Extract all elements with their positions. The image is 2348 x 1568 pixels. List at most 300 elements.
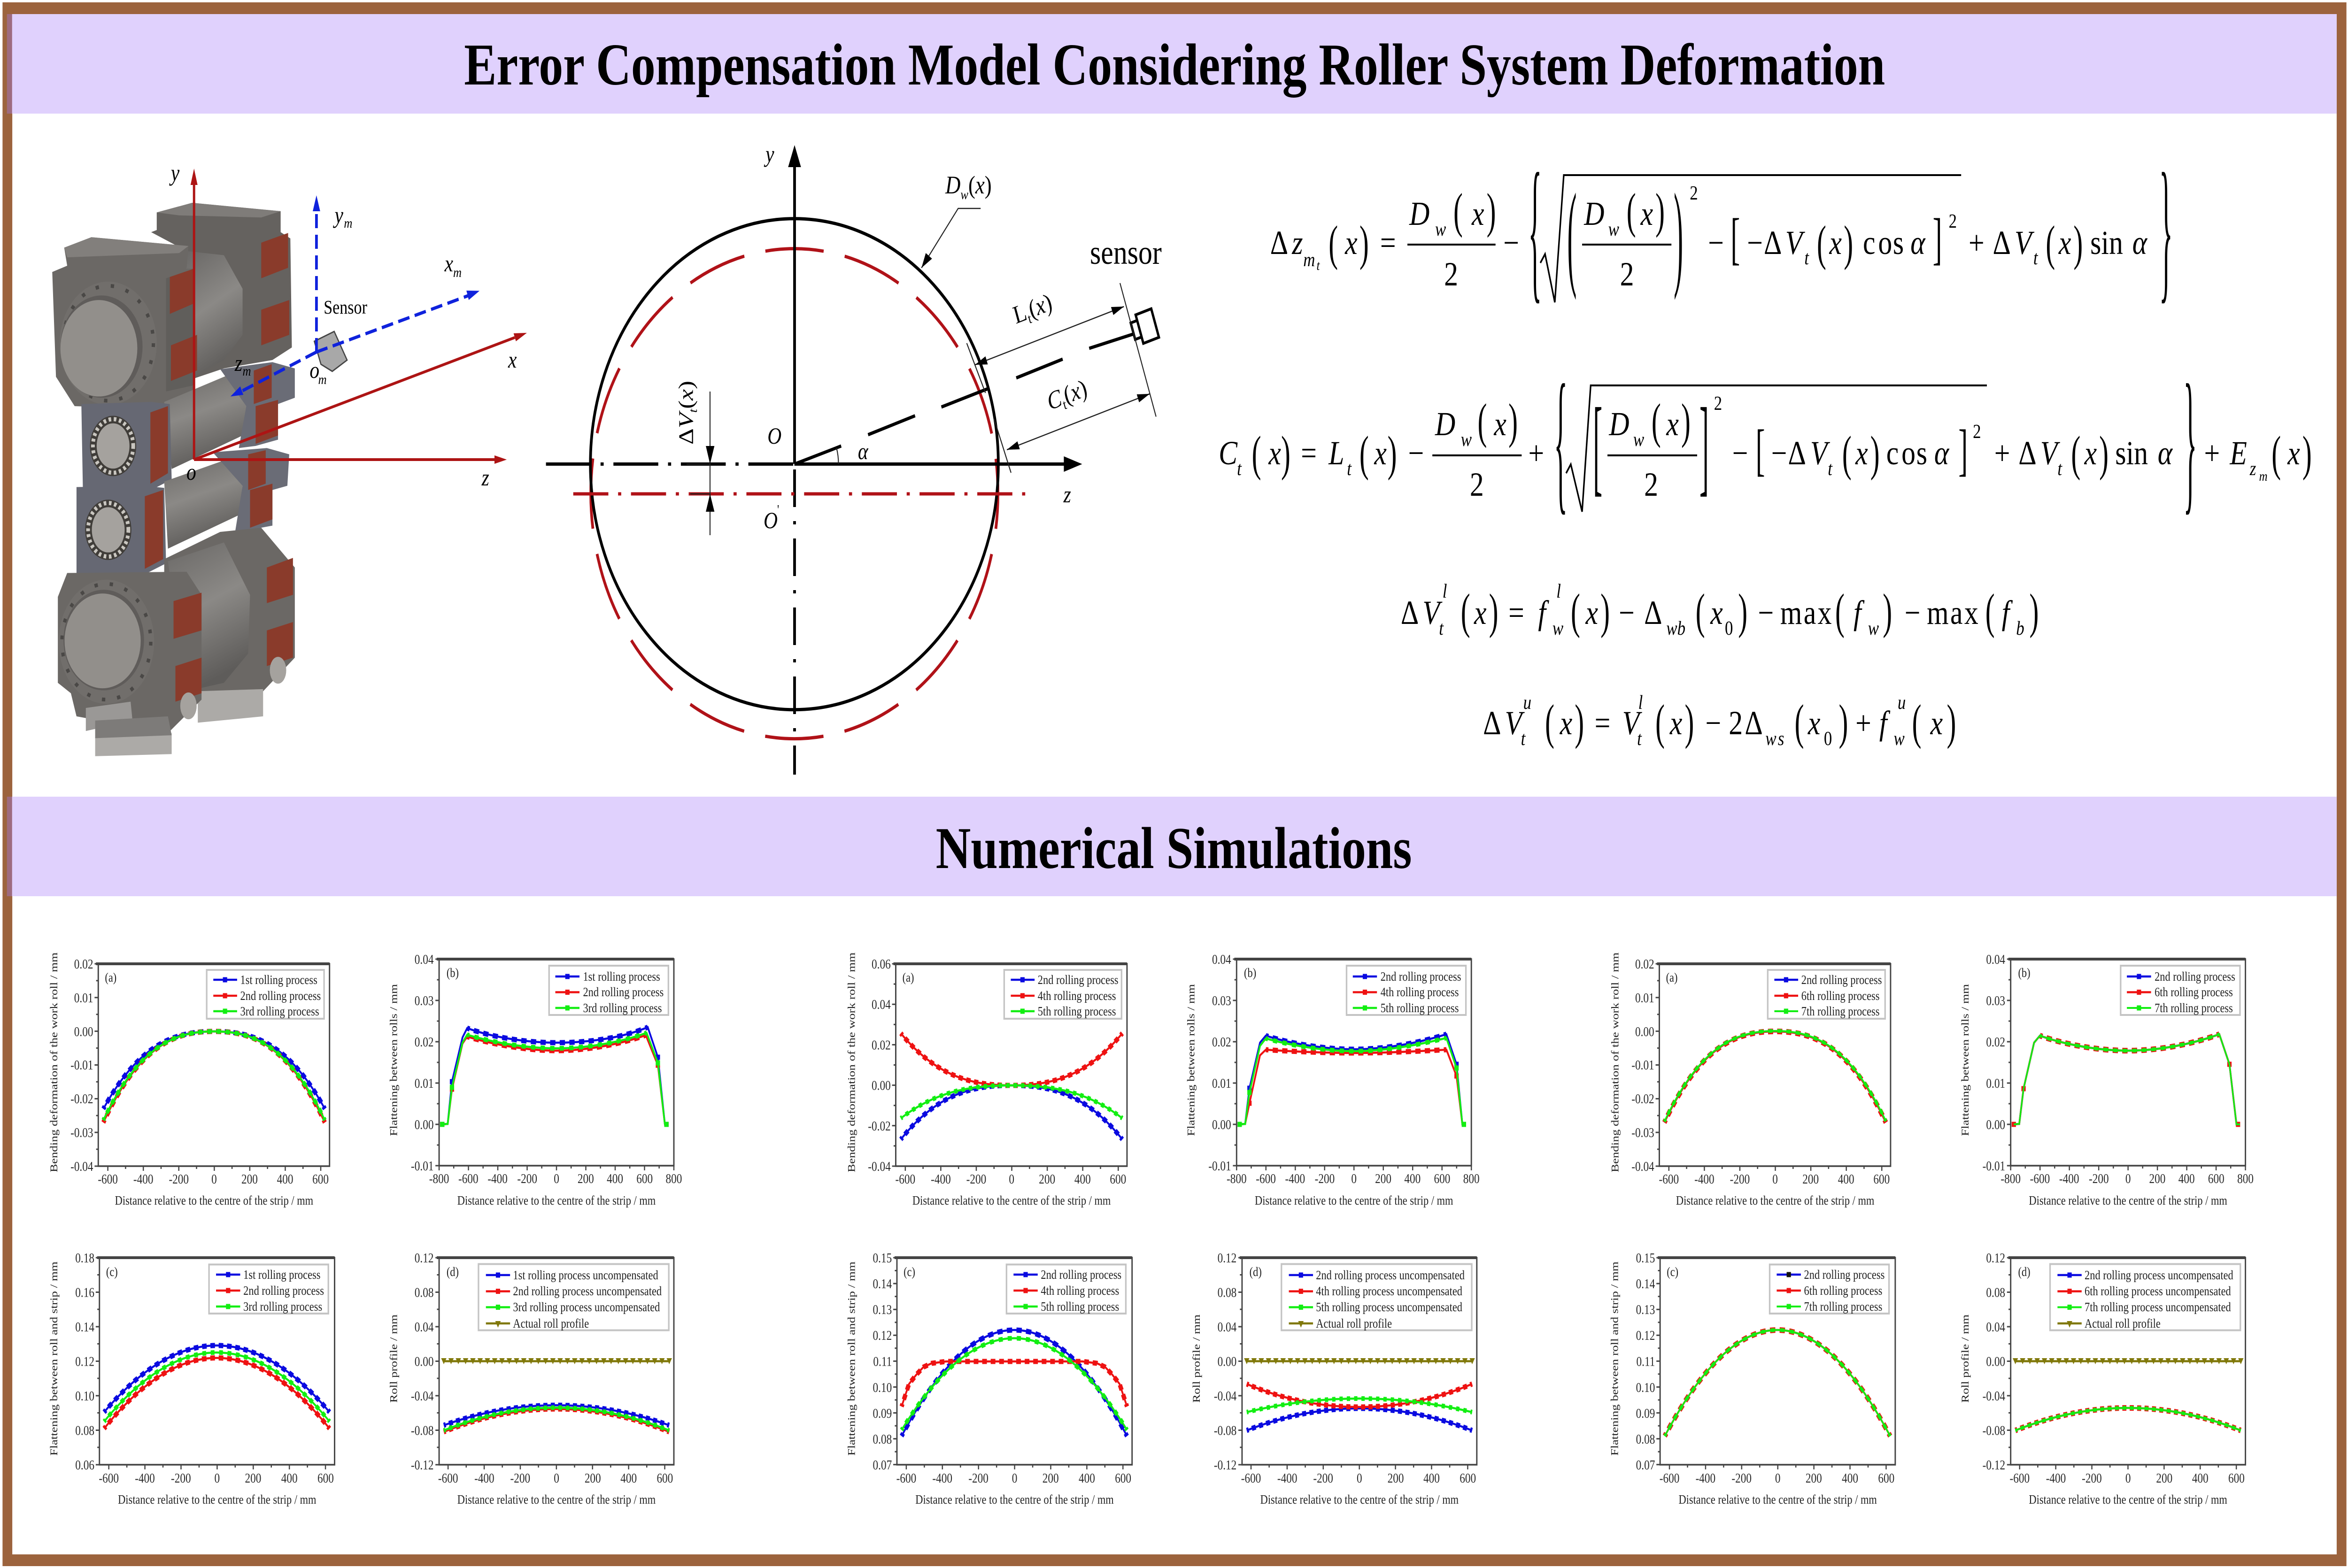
axes: -200	[2082, 1471, 2102, 1486]
axes: -0.01	[70, 1058, 93, 1073]
axes: 0.08	[75, 1423, 94, 1438]
axes: Flattening between rolls / mm	[1960, 984, 1971, 1136]
axes: -400	[2046, 1471, 2066, 1486]
y axis	[788, 145, 801, 775]
axes: -0.03	[70, 1125, 93, 1140]
axes: -200	[1730, 1172, 1750, 1187]
axes: -200	[1315, 1171, 1335, 1186]
axes: 0.16	[75, 1285, 94, 1300]
axes: 0.04	[415, 952, 434, 967]
figure: roller system 3D with coordinate axes	[52, 160, 527, 756]
axes: 0.04	[872, 997, 891, 1012]
axes: 0.00	[1986, 1117, 2005, 1132]
legend	[209, 1265, 328, 1314]
axes: Distance relative to the centre of the strip / mm	[118, 1493, 317, 1507]
axes: 0	[1009, 1172, 1014, 1187]
axes	[48, 953, 330, 1208]
axes	[1609, 1251, 1895, 1507]
equation 1: sin	[2090, 224, 2123, 261]
axes: 200	[1388, 1471, 1404, 1486]
axes: 0.13	[1636, 1302, 1655, 1317]
axes: Roll profile / mm	[1960, 1314, 1971, 1403]
legend: 5th rolling process	[1038, 1005, 1116, 1019]
axes: 0	[214, 1471, 220, 1486]
axes: 0	[1775, 1471, 1780, 1486]
legend: 6th rolling process uncompensated	[2085, 1284, 2231, 1299]
axis labels: Sensor	[324, 297, 367, 318]
axes: 0.18	[75, 1251, 94, 1266]
equation 2: {}	[1554, 352, 2197, 528]
black roll circle	[590, 219, 998, 710]
axes: 0.01	[1635, 991, 1654, 1006]
legend: 3rd rolling process	[583, 1001, 662, 1015]
axes	[1960, 1251, 2246, 1507]
equation 3: Δ=−Δ−−	[1401, 594, 1921, 631]
axes: -600	[1256, 1171, 1276, 1186]
axes: 0.08	[415, 1285, 433, 1300]
equation 2: []	[1593, 386, 1709, 506]
equation 1: ()()	[1453, 184, 1665, 238]
axes: 0.14	[873, 1276, 892, 1291]
legend: 4th rolling process	[1381, 985, 1459, 999]
diagram labels: y	[764, 141, 774, 167]
diagram labels: x)	[674, 381, 698, 400]
axes: -0.02	[70, 1091, 93, 1107]
diagram labels: sensor	[1090, 234, 1162, 271]
axes: -0.04	[1214, 1389, 1236, 1404]
equation 3: max	[1780, 594, 1832, 631]
axes: 200	[1802, 1172, 1819, 1187]
axes: -0.01	[1983, 1159, 2005, 1174]
axes: 200	[578, 1171, 594, 1186]
legend: 2nd rolling process	[1801, 973, 1882, 987]
axes: -400	[2059, 1171, 2079, 1186]
axis labels: m	[243, 363, 251, 379]
figure: roll cross-section with sensor	[546, 141, 1162, 775]
diagram labels: w	[960, 186, 969, 202]
axes: 0	[554, 1171, 559, 1186]
axes: -200	[169, 1172, 189, 1187]
axes: -200	[1731, 1471, 1752, 1486]
equation 1: zxVxαVxα	[1291, 224, 2147, 261]
equation 1: tt	[1804, 247, 2039, 269]
axis labels: m	[318, 371, 327, 387]
axes: Flattening between roll and strip / mm	[1609, 1261, 1621, 1456]
axes: -600	[1241, 1471, 1261, 1486]
legend: 7th rolling process uncompensated	[2085, 1300, 2231, 1314]
axes: 0.12	[1636, 1328, 1655, 1343]
legend: 2nd rolling process uncompensated	[513, 1284, 662, 1299]
axes	[388, 952, 682, 1208]
axes: -200	[966, 1172, 986, 1187]
dashed radial line	[795, 333, 1135, 464]
axes: 200	[1039, 1172, 1055, 1187]
axes: 0.10	[1636, 1380, 1655, 1395]
equation 2: CxLxVxαVxαEx	[1219, 435, 2300, 472]
axes: 200	[1375, 1171, 1391, 1186]
red displaced circle	[591, 249, 998, 739]
diagram labels: (	[1026, 294, 1039, 323]
axes: 400	[1838, 1172, 1854, 1187]
axes: 400	[2192, 1471, 2209, 1486]
curves	[104, 1345, 330, 1429]
axes: (a)	[903, 971, 914, 985]
legend: 2nd rolling process uncompensated	[1316, 1268, 1465, 1283]
axes: 200	[1043, 1471, 1059, 1486]
axes: 0.09	[873, 1406, 892, 1421]
sensor symbol	[1131, 309, 1159, 344]
axes: -0.04	[1631, 1159, 1654, 1174]
axes: 0.02	[1212, 1035, 1231, 1050]
axes: 600	[657, 1471, 673, 1486]
legend	[2121, 966, 2240, 1015]
axes: 0.06	[872, 957, 891, 972]
equation 4: ulu	[1523, 692, 1906, 714]
axis labels: y	[333, 202, 343, 228]
axes: 0.08	[1218, 1285, 1236, 1300]
axes	[388, 1251, 674, 1507]
diagram labels: t	[1061, 396, 1068, 413]
axes	[48, 1251, 335, 1507]
equation 2: ()()	[1477, 394, 1691, 448]
legend: 3rd rolling process uncompensated	[513, 1300, 660, 1314]
axes: 0	[554, 1471, 559, 1486]
axes: 0.02	[872, 1038, 891, 1053]
equation 2: 2	[1973, 421, 1981, 443]
axes: -400	[931, 1172, 951, 1187]
equation 2: 2	[1714, 393, 1722, 415]
axes: 0.00	[1635, 1024, 1654, 1039]
axes: (d)	[1250, 1265, 1262, 1279]
legend: Actual roll profile	[2085, 1317, 2161, 1331]
axes: -0.01	[411, 1159, 433, 1174]
axes: 0.04	[415, 1320, 434, 1335]
axes	[846, 953, 1127, 1208]
equation 1: ww	[1435, 219, 1619, 240]
chart set 3 (c): flattening between roll and strip	[1609, 1251, 1895, 1507]
legend: 7th rolling process	[1801, 1005, 1880, 1019]
legend: 4th rolling process	[1038, 989, 1116, 1003]
diagram labels: O	[764, 507, 778, 533]
axes: 0.00	[1218, 1354, 1236, 1369]
axes: Bending deformation of the work roll / mm	[48, 953, 60, 1172]
axes: Distance relative to the centre of the strip / mm	[912, 1194, 1111, 1208]
legend: 2nd rolling process	[243, 1284, 324, 1298]
axes: (c)	[106, 1265, 118, 1279]
axes: 0.02	[74, 957, 93, 972]
axes: 0.04	[1218, 1320, 1236, 1335]
legend: 2nd rolling process	[1041, 1268, 1121, 1282]
equation 2	[1219, 352, 2312, 528]
axis labels: o	[186, 459, 196, 485]
axes: 0.02	[1986, 1035, 2005, 1050]
legend: 4th rolling process uncompensated	[1316, 1284, 1463, 1299]
legend: 7th rolling process	[1804, 1300, 1882, 1314]
axes: -600	[1660, 1471, 1679, 1486]
equation 1: t	[1317, 257, 1321, 273]
chart set 1 (b): flattening between rolls	[388, 952, 682, 1208]
axes: 0.01	[1212, 1076, 1231, 1091]
diagram labels: D	[945, 171, 960, 199]
axes: 0.00	[415, 1354, 433, 1369]
diagram labels: z	[1063, 481, 1071, 507]
equation 1: Δ=−−−Δ+Δ	[1270, 224, 2011, 261]
axes: 0.07	[1636, 1458, 1655, 1473]
axis labels: x	[508, 346, 517, 373]
axes: Distance relative to the centre of the strip / mm	[2029, 1194, 2227, 1208]
axes: 600	[1460, 1471, 1476, 1486]
axis labels: z	[234, 350, 242, 376]
legend: 2nd rolling process	[583, 985, 664, 999]
legend	[479, 1264, 669, 1331]
diagram labels: (	[674, 400, 698, 409]
axes: 0.15	[1636, 1251, 1655, 1266]
axes: -0.04	[1983, 1389, 2005, 1404]
axes: 0.00	[1986, 1354, 2005, 1369]
axes: 0.01	[1986, 1076, 2005, 1091]
axes: 0.03	[1212, 993, 1231, 1008]
curves	[2012, 1358, 2244, 1430]
axes: (d)	[447, 1265, 459, 1279]
axes: -600	[2030, 1171, 2050, 1186]
diagram labels: x)	[1067, 374, 1090, 407]
legend: 3rd rolling process	[243, 1300, 322, 1314]
axes: 0	[211, 1172, 217, 1187]
equation 2: cos	[1886, 435, 1927, 472]
axes: 0.14	[75, 1320, 94, 1335]
axes: -400	[135, 1471, 155, 1486]
legend: 2nd rolling process	[1804, 1268, 1885, 1282]
diagram labels: L	[1010, 298, 1029, 329]
axes: (b)	[447, 966, 459, 980]
axes: 0.11	[1637, 1354, 1655, 1369]
legend	[1282, 1264, 1472, 1331]
equation 2: DxDx	[1435, 406, 1679, 443]
axes: 400	[1074, 1172, 1091, 1187]
axes: Flattening between rolls / mm	[1186, 984, 1197, 1136]
axes: -0.08	[1214, 1423, 1236, 1438]
axes: 0.00	[415, 1117, 433, 1132]
axis labels: m	[344, 215, 352, 231]
legend: 6th rolling process	[1804, 1284, 1882, 1298]
axes: -400	[932, 1471, 952, 1486]
axis labels: y	[169, 160, 180, 186]
axes: Distance relative to the centre of the strip / mm	[1260, 1493, 1459, 1507]
equation 1: 22	[1444, 256, 1634, 293]
axes: Bending deformation of the work roll / mm	[846, 953, 857, 1172]
axes: -600	[2009, 1471, 2030, 1486]
legend: 7th rolling process	[2155, 1001, 2233, 1015]
diagram labels: (	[968, 171, 975, 199]
axes: -0.02	[1631, 1091, 1654, 1107]
axes: -600	[896, 1172, 915, 1187]
axes: 600	[2228, 1471, 2245, 1486]
axes: 600	[1434, 1171, 1450, 1186]
chart set 2 (a): bending deformation	[846, 953, 1127, 1208]
diagram labels: t	[1026, 310, 1033, 327]
axes: 0.00	[74, 1024, 93, 1039]
equation 4: ttwsw	[1521, 728, 1905, 750]
axes: Distance relative to the centre of the strip / mm	[915, 1493, 1114, 1507]
chart set 2 (b): flattening between rolls	[1186, 952, 1480, 1208]
curves	[440, 1358, 672, 1432]
equation 3: 0	[1725, 618, 1733, 639]
equation 2: tz	[2057, 458, 2256, 480]
axes: Distance relative to the centre of the strip / mm	[457, 1194, 656, 1208]
legend: 6th rolling process	[2155, 985, 2233, 999]
axes: -200	[510, 1471, 530, 1486]
equation 4: 0	[1824, 728, 1832, 750]
axes: 0.08	[1986, 1285, 2005, 1300]
diagram labels: C	[1044, 384, 1065, 415]
axes: 0.04	[1986, 952, 2005, 967]
axes: 0.09	[1636, 1406, 1655, 1421]
chart set 2 (c): flattening between roll and strip	[846, 1251, 1132, 1507]
axes: -600	[438, 1471, 458, 1486]
legend: 1st rolling process	[243, 1268, 320, 1282]
axes: 600	[1873, 1172, 1890, 1187]
axes: -0.01	[1208, 1159, 1231, 1174]
equation 1: []	[1730, 207, 1942, 270]
axes: -600	[98, 1172, 118, 1187]
axes: 0	[1772, 1172, 1778, 1187]
red offset centre line	[573, 492, 1032, 496]
axes: 0.01	[74, 991, 93, 1006]
curves	[103, 1031, 325, 1122]
legend: 4th rolling process	[1041, 1284, 1119, 1298]
axes: 200	[1806, 1471, 1822, 1486]
axes: (a)	[1666, 971, 1677, 985]
axes: 800	[1463, 1171, 1480, 1186]
equation 4: ()()()()	[1545, 695, 1956, 749]
axes: -400	[133, 1172, 153, 1187]
diagram labels: ΔV	[674, 413, 698, 445]
axes: 200	[245, 1471, 261, 1486]
red axes y z x	[191, 169, 527, 464]
legend: 2nd rolling process	[1038, 973, 1119, 987]
legend	[1346, 966, 1466, 1015]
equation 1: cos	[1863, 224, 1904, 261]
equation 2: =−+−−Δ+Δ+	[1301, 435, 2220, 472]
axes: (c)	[1667, 1265, 1678, 1279]
axes: -0.08	[1983, 1423, 2005, 1438]
legend: 2nd rolling process	[240, 989, 321, 1003]
axes: -200	[1313, 1471, 1333, 1486]
legend: 5th rolling process	[1041, 1300, 1119, 1314]
axes: Distance relative to the centre of the strip / mm	[1255, 1194, 1453, 1208]
axes: Flattening between roll and strip / mm	[48, 1261, 60, 1456]
axes: -400	[474, 1471, 494, 1486]
axes: -400	[1694, 1172, 1715, 1187]
axes: -600	[896, 1471, 916, 1486]
axes: 0.12	[415, 1251, 433, 1266]
axes: 0.00	[872, 1078, 891, 1093]
legend	[2050, 1264, 2240, 1331]
axes: (b)	[2018, 966, 2031, 980]
legend: 1st rolling process	[583, 970, 660, 984]
axes: 0.11	[873, 1354, 892, 1369]
axes: 0.10	[873, 1380, 892, 1395]
axes: Distance relative to the centre of the strip / mm	[2029, 1493, 2227, 1507]
axes: 0.10	[75, 1389, 94, 1404]
axes: 0.12	[1986, 1251, 2005, 1266]
axes: -600	[458, 1171, 479, 1186]
equation 2: ()()()()()	[1252, 427, 2312, 481]
chart set 1 (d): roll profile	[388, 1251, 674, 1507]
axis labels: z	[481, 464, 489, 491]
axes: 0.00	[1212, 1117, 1231, 1132]
axes: 0	[1351, 1171, 1357, 1186]
axes: Bending deformation of the work roll / mm	[1609, 953, 1621, 1172]
axes: Distance relative to the centre of the strip / mm	[115, 1194, 313, 1208]
axes: 400	[1079, 1471, 1095, 1486]
axes: Roll profile / mm	[388, 1314, 400, 1403]
axes: -0.01	[1631, 1058, 1654, 1073]
axes: 0.12	[75, 1354, 94, 1369]
axes: 0.08	[873, 1432, 892, 1447]
axes: 0.12	[1218, 1251, 1236, 1266]
chart set 1 (c): flattening between roll and strip	[48, 1251, 335, 1507]
axes: 200	[2149, 1171, 2165, 1186]
legend: 5th rolling process	[1381, 1001, 1459, 1015]
legend: 6th rolling process	[1801, 989, 1880, 1003]
title banner	[7, 14, 2337, 114]
equation 4: VxVxxfx	[1505, 705, 1943, 742]
axes	[1960, 952, 2254, 1208]
axes	[1186, 952, 1480, 1208]
chart set 3 (b): flattening between rolls	[1960, 952, 2254, 1208]
axes: 200	[585, 1471, 601, 1486]
axes: -400	[1277, 1471, 1298, 1486]
axes: 400	[1423, 1471, 1440, 1486]
equation 4: Δ=−2Δ+	[1483, 705, 1871, 742]
axes: 0.15	[873, 1251, 892, 1266]
legend: Actual roll profile	[1316, 1317, 1392, 1331]
legend: 3rd rolling process	[240, 1005, 319, 1019]
axes: 0	[1357, 1471, 1362, 1486]
axes: (a)	[105, 971, 116, 985]
axis labels	[169, 160, 517, 491]
equation 1: DxDx	[1409, 195, 1653, 232]
equation 3: twwbwb	[1439, 618, 2024, 639]
axes: 800	[666, 1171, 682, 1186]
curves	[442, 1027, 668, 1124]
title banner: Error Compensation Model Considering Roller System Deformation	[464, 32, 1885, 98]
axes: 400	[2178, 1171, 2195, 1186]
chart set 3 (a): bending deformation	[1609, 953, 1891, 1208]
axes: Roll profile / mm	[1191, 1314, 1203, 1403]
legend	[207, 970, 324, 1019]
curves	[901, 1033, 1122, 1139]
axes	[846, 1251, 1132, 1507]
equation 3: max	[1927, 594, 1978, 631]
axes: 200	[241, 1172, 258, 1187]
axes: Distance relative to the centre of the strip / mm	[1678, 1493, 1877, 1507]
equation 2: ww	[1461, 429, 1644, 451]
legend	[1769, 1265, 1889, 1314]
axes: 0.06	[75, 1458, 94, 1473]
axes: 0.04	[1212, 952, 1231, 967]
axes: -0.12	[1983, 1458, 2005, 1473]
axes: 0.14	[1636, 1276, 1655, 1291]
legend: 1st rolling process uncompensated	[513, 1268, 658, 1283]
curves	[1240, 1034, 1466, 1124]
axes: Flattening between roll and strip / mm	[846, 1261, 857, 1456]
axes: Distance relative to the centre of the strip / mm	[1676, 1194, 1874, 1208]
axes: -0.12	[1214, 1458, 1236, 1473]
axis labels: o	[309, 357, 319, 383]
axes: 0.02	[415, 1035, 433, 1050]
